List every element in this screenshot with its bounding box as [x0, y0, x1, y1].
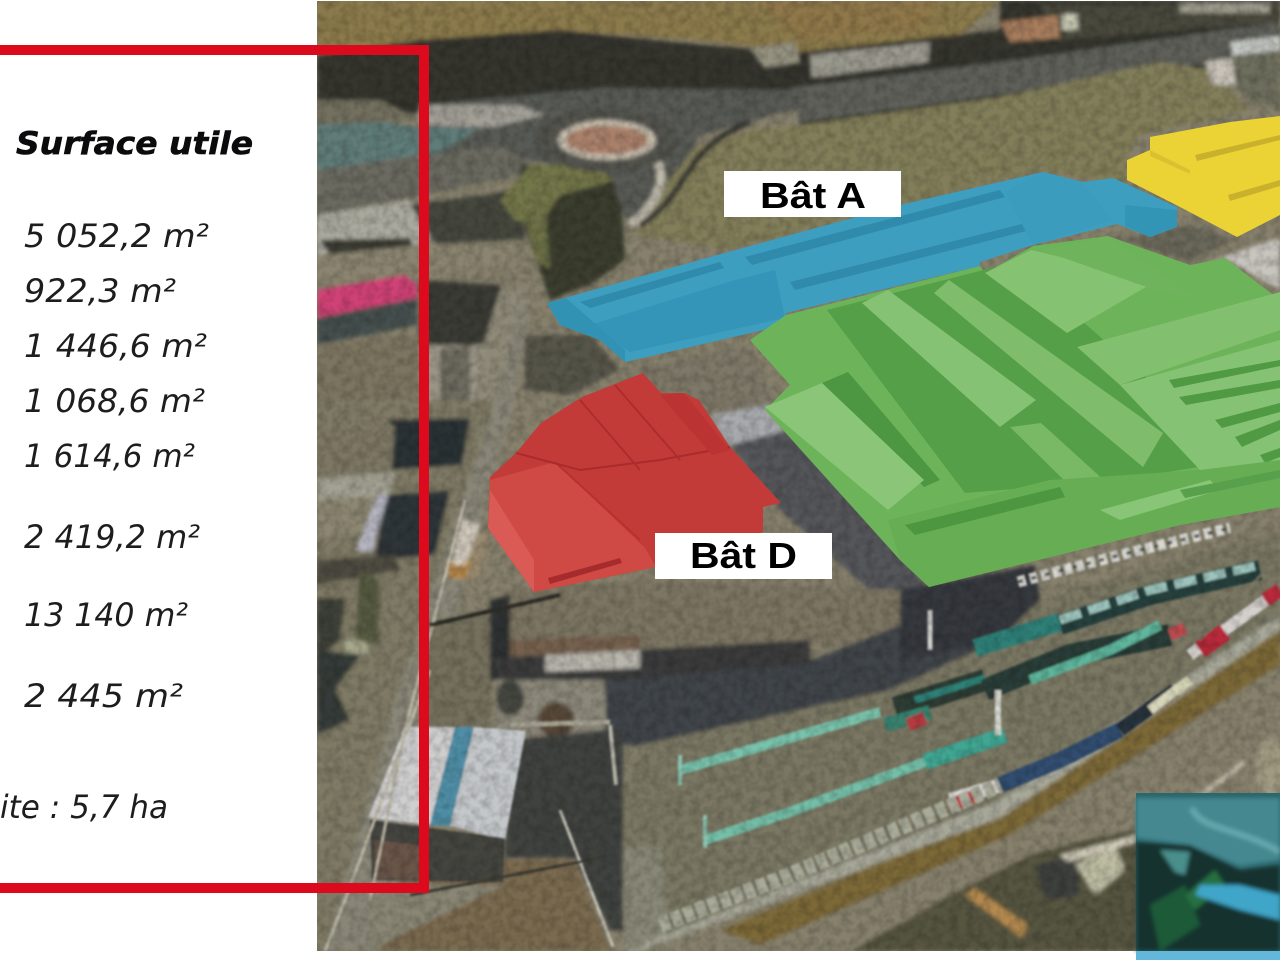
main road	[328, 372, 517, 951]
building B, green	[750, 236, 1280, 587]
left road strip	[317, 145, 545, 215]
lower-left white building	[368, 727, 526, 882]
light roof slabs	[765, 383, 924, 510]
dark asphalt	[505, 728, 623, 930]
parking surface	[623, 530, 1280, 951]
dark roof bands	[827, 266, 1197, 493]
trees	[520, 165, 625, 300]
block below Bât D area	[429, 616, 492, 728]
red frame	[0, 50, 424, 888]
label: Bât D	[655, 533, 832, 579]
value: 922,3 m²: 922,3 m²	[24, 272, 176, 310]
shrubs at bottom right	[850, 830, 1136, 951]
shadow walls	[605, 620, 1000, 745]
roundabout	[564, 147, 664, 172]
value: 1 614,6 m²: 1 614,6 m²	[24, 437, 195, 475]
bottom-right teal overlay panel	[1136, 793, 1280, 960]
value: 13 140 m²: 13 140 m²	[24, 596, 188, 634]
white fragments and dark buildings	[317, 200, 440, 255]
tree line	[317, 0, 1280, 125]
value: 2 445 m²: 2 445 m²	[24, 677, 183, 715]
label: Bât A	[724, 171, 901, 217]
surface values list	[24, 217, 209, 715]
value: 2 419,2 m²: 2 419,2 m²	[24, 518, 200, 556]
building A, blue	[547, 172, 1177, 362]
pink roof	[317, 275, 417, 318]
site total text: ite : 5,7 ha	[0, 788, 168, 826]
value: 1 068,6 m²: 1 068,6 m²	[24, 382, 205, 420]
heading: Surface utile: Surface utile	[16, 126, 253, 162]
building D, red	[488, 373, 781, 592]
top road	[790, 22, 1280, 125]
stone arch block	[495, 680, 605, 735]
field	[636, 62, 1250, 250]
junction by roundabout	[420, 88, 800, 225]
tan plot	[380, 860, 610, 951]
aerial photo background	[317, 0, 1280, 951]
swirl road	[630, 150, 661, 225]
gap beside buildings	[648, 350, 772, 410]
lower left plots	[334, 400, 494, 685]
glazed building	[317, 118, 480, 170]
road below parking	[702, 898, 788, 931]
road near blue building	[476, 288, 528, 400]
value: 5 052,2 m²: 5 052,2 m²	[24, 217, 209, 255]
right side ridges	[1077, 292, 1280, 385]
label: Bât A: Bât A	[760, 175, 866, 216]
building C, yellow	[1127, 116, 1280, 237]
label: Bât D: Bât D	[690, 535, 797, 576]
value: 1 446,6 m²: 1 446,6 m²	[24, 327, 207, 365]
parked cars	[325, 500, 1280, 951]
photographic grain	[317, 0, 1280, 951]
lower bay	[888, 460, 1280, 587]
dry hillside	[317, 0, 1000, 55]
